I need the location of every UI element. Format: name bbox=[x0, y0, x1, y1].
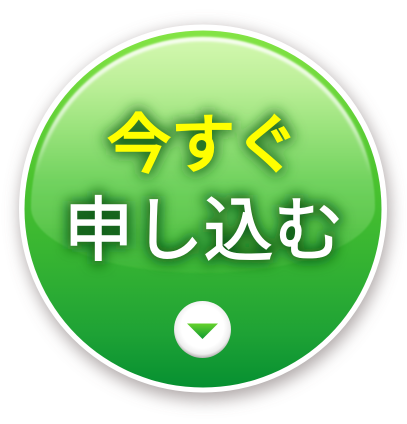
heading: 申し込む: 申し込む bbox=[64, 192, 344, 270]
white outer ring bbox=[19, 24, 387, 392]
drop shadow bbox=[20, 28, 390, 400]
green button disc bbox=[24, 30, 382, 388]
glossy highlight bbox=[31, 37, 375, 273]
heading glow: 申し込む: 申し込む bbox=[64, 192, 344, 270]
icon: green down triangle bbox=[187, 324, 218, 339]
heading: 今すぐ: 今すぐ bbox=[107, 109, 299, 181]
heading glow: 今すぐ: 今すぐ bbox=[107, 109, 299, 181]
gloss rim light bbox=[33, 39, 373, 190]
icon: white round knob with down arrow bbox=[174, 301, 231, 358]
